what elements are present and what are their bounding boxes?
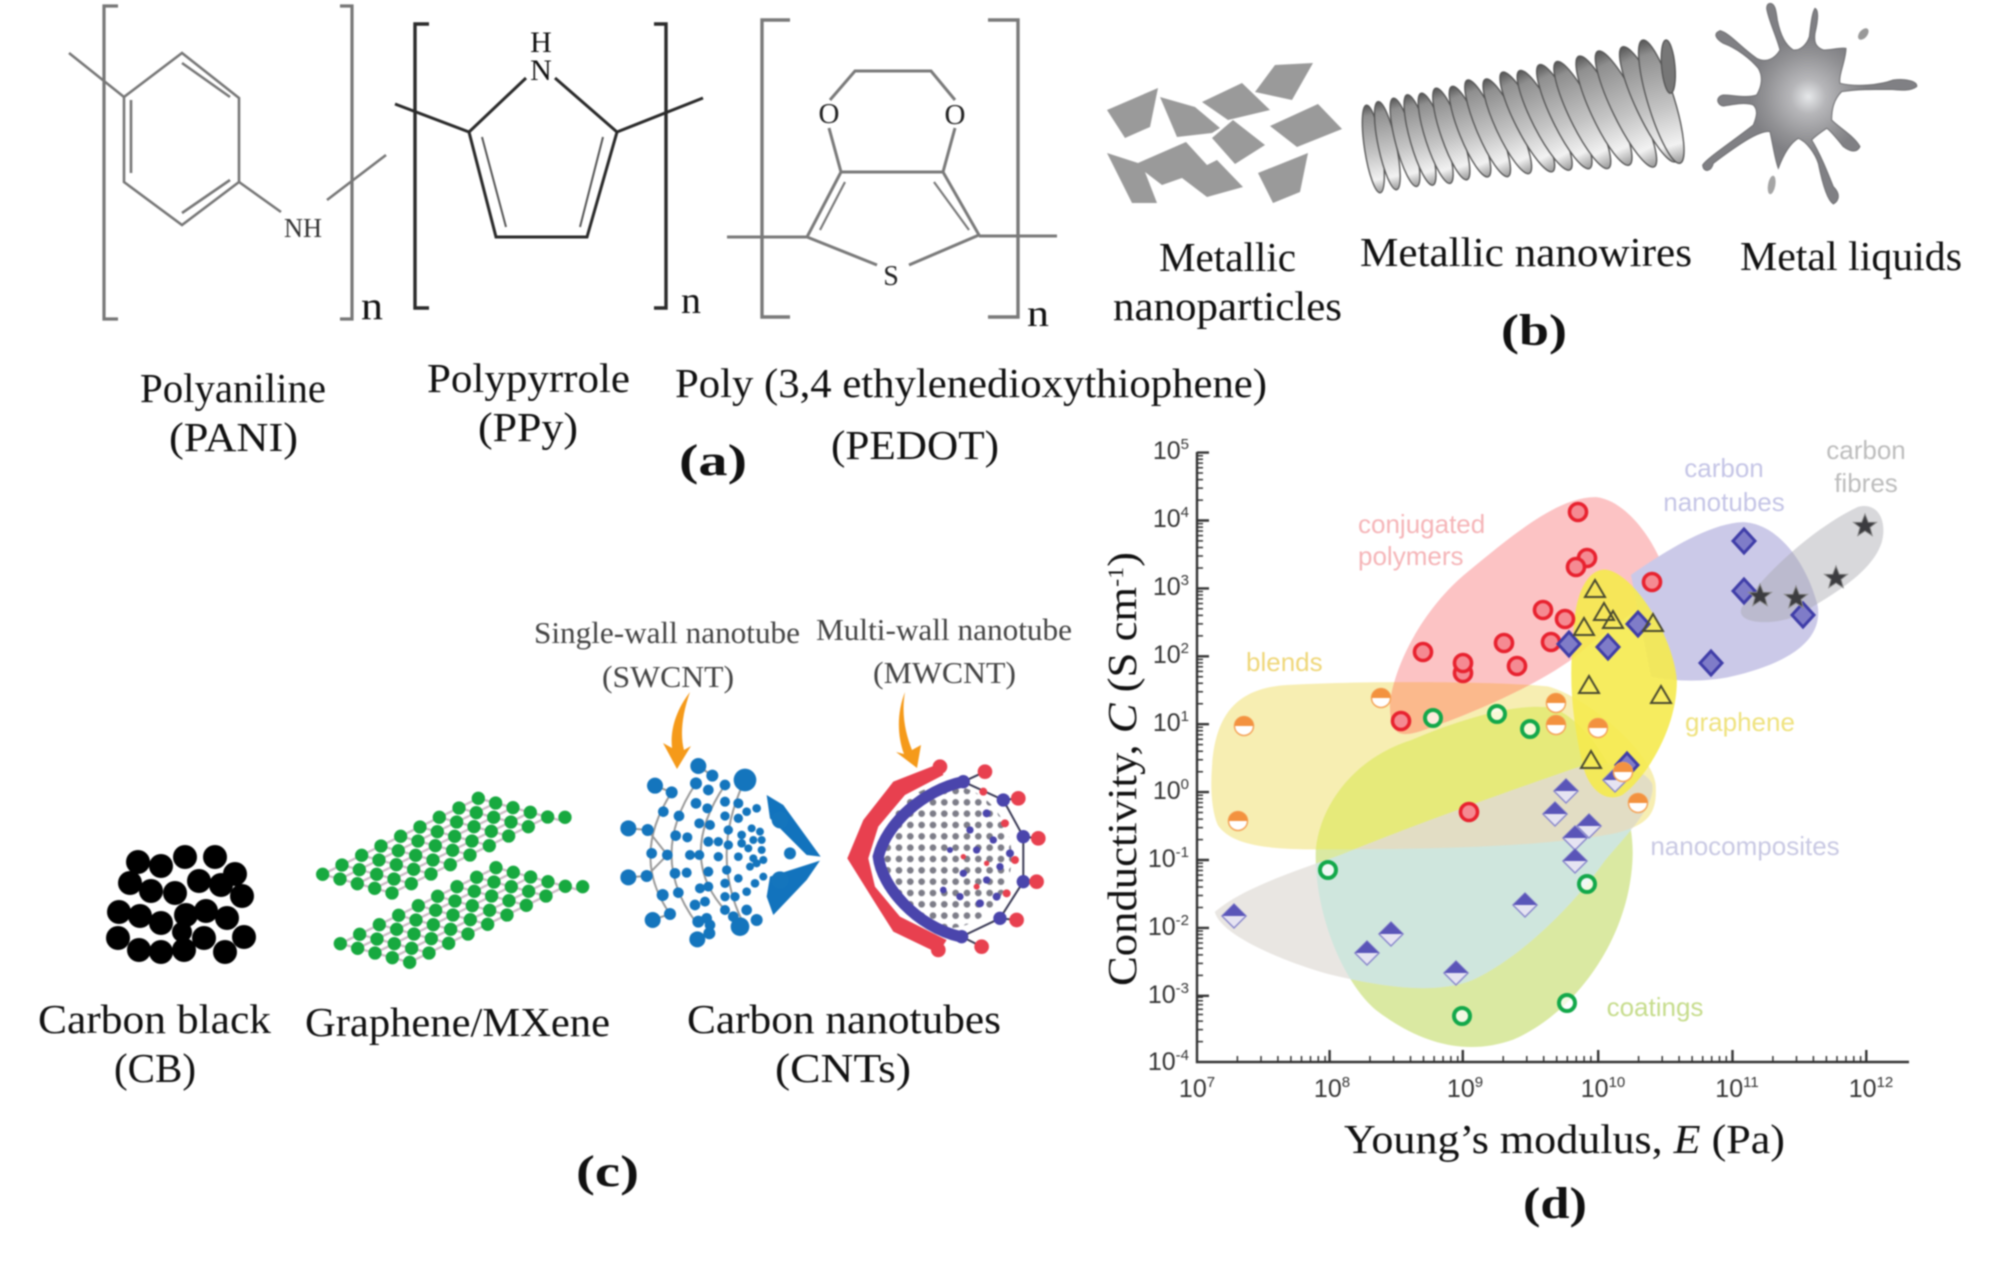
label: Metallic: Metallic bbox=[1159, 234, 1296, 280]
icon: metallic nanowires bbox=[1358, 36, 1693, 194]
icon: carbon black bbox=[106, 845, 256, 964]
y tick labels: -4 bbox=[1176, 1047, 1189, 1064]
region label: carbon nanotubes: nanotubes bbox=[1663, 487, 1785, 517]
label: CNTs: (CNTs) bbox=[775, 1045, 911, 1091]
panel letter b: (b) bbox=[1501, 306, 1567, 355]
label: Metal liquids: Metal liquids bbox=[1740, 233, 1962, 279]
x axis title: Young’s modulus, E (Pa) bbox=[1344, 1116, 1785, 1162]
region label: carbon nanotubes bbox=[1663, 453, 1785, 517]
label: Polypyrrole: Polypyrrole bbox=[427, 355, 630, 401]
y axis title: Conductivity, C (S cm bbox=[1099, 596, 1145, 986]
region label: coatings: coatings bbox=[1607, 992, 1703, 1022]
structure: polypyrrole: N bbox=[530, 54, 552, 87]
y tick labels: 10 bbox=[1148, 913, 1176, 941]
y tick labels: 10 bbox=[1148, 1048, 1176, 1076]
label: MWCNT: (MWCNT) bbox=[873, 655, 1016, 690]
panel letter d: (d) bbox=[1523, 1179, 1587, 1228]
y tick labels: 10 bbox=[1148, 845, 1176, 873]
x tick labels: 11 bbox=[1743, 1074, 1759, 1091]
x tick labels: 10 bbox=[1314, 1075, 1342, 1103]
structure: polypyrrole: H bbox=[530, 26, 552, 59]
panel c: carbon fillers bbox=[38, 612, 1072, 1196]
x tick labels: 10 bbox=[1715, 1075, 1743, 1103]
structure: PEDOT: S bbox=[883, 261, 899, 292]
panel letter c: (c) bbox=[576, 1147, 639, 1196]
structure: polypyrrole: n bbox=[681, 280, 701, 322]
label: PPy: (PPy) bbox=[478, 404, 578, 450]
region label: conjugated polymers bbox=[1358, 509, 1485, 571]
x tick labels: 12 bbox=[1877, 1074, 1893, 1091]
label: nanoparticles: nanoparticles bbox=[1113, 283, 1342, 329]
arrow: to SWCNT bbox=[663, 692, 691, 769]
y tick labels: 0 bbox=[1181, 776, 1189, 793]
label: Polyaniline: Polyaniline bbox=[140, 365, 326, 411]
y tick labels: 10 bbox=[1148, 981, 1176, 1009]
y tick labels: -1 bbox=[1176, 844, 1189, 861]
region label: carbon fibres: fibres bbox=[1834, 468, 1898, 498]
region label: carbon fibres: carbon bbox=[1826, 435, 1906, 465]
label: Carbon nanotubes: Carbon nanotubes bbox=[687, 996, 1001, 1042]
y tick labels: 10 bbox=[1153, 437, 1181, 465]
icon: multi-wall nanotube bbox=[847, 759, 1046, 957]
markers: coatings bbox=[1320, 706, 1595, 1024]
region label: carbon nanotubes: carbon bbox=[1684, 453, 1764, 483]
label: Single-wall nanotube: Single-wall nanotube bbox=[534, 615, 800, 650]
structure: polyaniline: n bbox=[361, 283, 383, 328]
y tick labels: -2 bbox=[1176, 912, 1189, 929]
x tick labels: 10 bbox=[1849, 1075, 1877, 1103]
markers: nanocomposites bbox=[1222, 768, 1627, 985]
label: SWCNT: (SWCNT) bbox=[602, 659, 734, 694]
material regions bbox=[1211, 497, 1883, 1047]
icon: graphene sheets bbox=[316, 792, 589, 969]
region label: conjugated polymers: polymers bbox=[1358, 541, 1463, 571]
panel a: conducting polymers bbox=[69, 6, 1267, 485]
label: PANI: (PANI) bbox=[169, 414, 298, 460]
y tick labels: 1 bbox=[1181, 708, 1189, 725]
label: Carbon black: Carbon black bbox=[38, 996, 272, 1042]
y tick labels bbox=[1148, 436, 1189, 1076]
structure: PEDOT bbox=[727, 20, 1057, 335]
label: Poly (3,4 ethylenedioxythiophene): Poly (3,4 ethylenedioxythiophene) bbox=[675, 360, 1267, 406]
y tick labels: 10 bbox=[1153, 709, 1181, 737]
markers: blends bbox=[1228, 688, 1648, 830]
region label: graphene: graphene bbox=[1685, 707, 1795, 737]
panel letter a: (a) bbox=[679, 436, 747, 485]
y tick labels: 4 bbox=[1181, 504, 1189, 521]
region label: blends: blends bbox=[1246, 647, 1323, 677]
axes bbox=[1197, 452, 1909, 1062]
x tick labels: 7 bbox=[1207, 1074, 1215, 1091]
y axis title: ) bbox=[1099, 552, 1145, 567]
x tick labels: 8 bbox=[1342, 1074, 1350, 1091]
markers: carbon fibres bbox=[1748, 514, 1876, 608]
x tick labels: 9 bbox=[1475, 1074, 1483, 1091]
label: Multi-wall nanotube: Multi-wall nanotube bbox=[816, 612, 1072, 647]
y axis title: -1 bbox=[1103, 567, 1128, 587]
x tick labels: 10 bbox=[1581, 1075, 1609, 1103]
x tick labels bbox=[1179, 1074, 1893, 1103]
region label: conjugated polymers: conjugated bbox=[1358, 509, 1485, 539]
label: Graphene/MXene: Graphene/MXene bbox=[305, 999, 610, 1045]
y tick labels: 10 bbox=[1153, 505, 1181, 533]
markers: conjugated polymers bbox=[1392, 504, 1660, 820]
y tick labels: 2 bbox=[1181, 640, 1189, 657]
arrow: to MWCNT bbox=[896, 692, 921, 768]
panel d: conductivity vs modulus chart bbox=[1099, 435, 1909, 1228]
label: Metallic nanowires: Metallic nanowires bbox=[1360, 229, 1692, 275]
structure: polyaniline: NH bbox=[284, 213, 322, 243]
label: PEDOT: (PEDOT) bbox=[831, 422, 999, 468]
markers: carbon nanotubes bbox=[1558, 529, 1814, 777]
panel b: metallic fillers bbox=[1107, 3, 1962, 355]
y tick labels: 10 bbox=[1153, 573, 1181, 601]
x tick labels: 10 bbox=[1179, 1075, 1207, 1103]
structure: PEDOT: O bbox=[945, 99, 965, 131]
markers: graphene bbox=[1574, 580, 1671, 768]
x tick labels: 10 bbox=[1609, 1074, 1625, 1091]
markers: overlapping blend point bbox=[1614, 762, 1632, 782]
icon: metallic nanoparticles bbox=[1107, 63, 1342, 203]
structure: PEDOT: O bbox=[819, 98, 839, 130]
structure: PEDOT: n bbox=[1027, 293, 1049, 335]
icon: single-wall nanotube bbox=[620, 758, 821, 947]
y tick labels: 5 bbox=[1181, 436, 1189, 453]
y tick labels: 3 bbox=[1181, 572, 1189, 589]
x tick labels: 10 bbox=[1447, 1075, 1475, 1103]
icon: metal liquid splash bbox=[1703, 3, 1917, 204]
region label: nanocomposites: nanocomposites bbox=[1650, 831, 1840, 861]
label: CB: (CB) bbox=[114, 1045, 196, 1091]
region label: carbon fibres bbox=[1826, 435, 1906, 498]
structure: polyaniline bbox=[69, 6, 386, 328]
y tick labels: -3 bbox=[1176, 980, 1189, 997]
y tick labels: 10 bbox=[1153, 777, 1181, 805]
y tick labels: 10 bbox=[1153, 641, 1181, 669]
structure: polypyrrole bbox=[395, 24, 703, 322]
